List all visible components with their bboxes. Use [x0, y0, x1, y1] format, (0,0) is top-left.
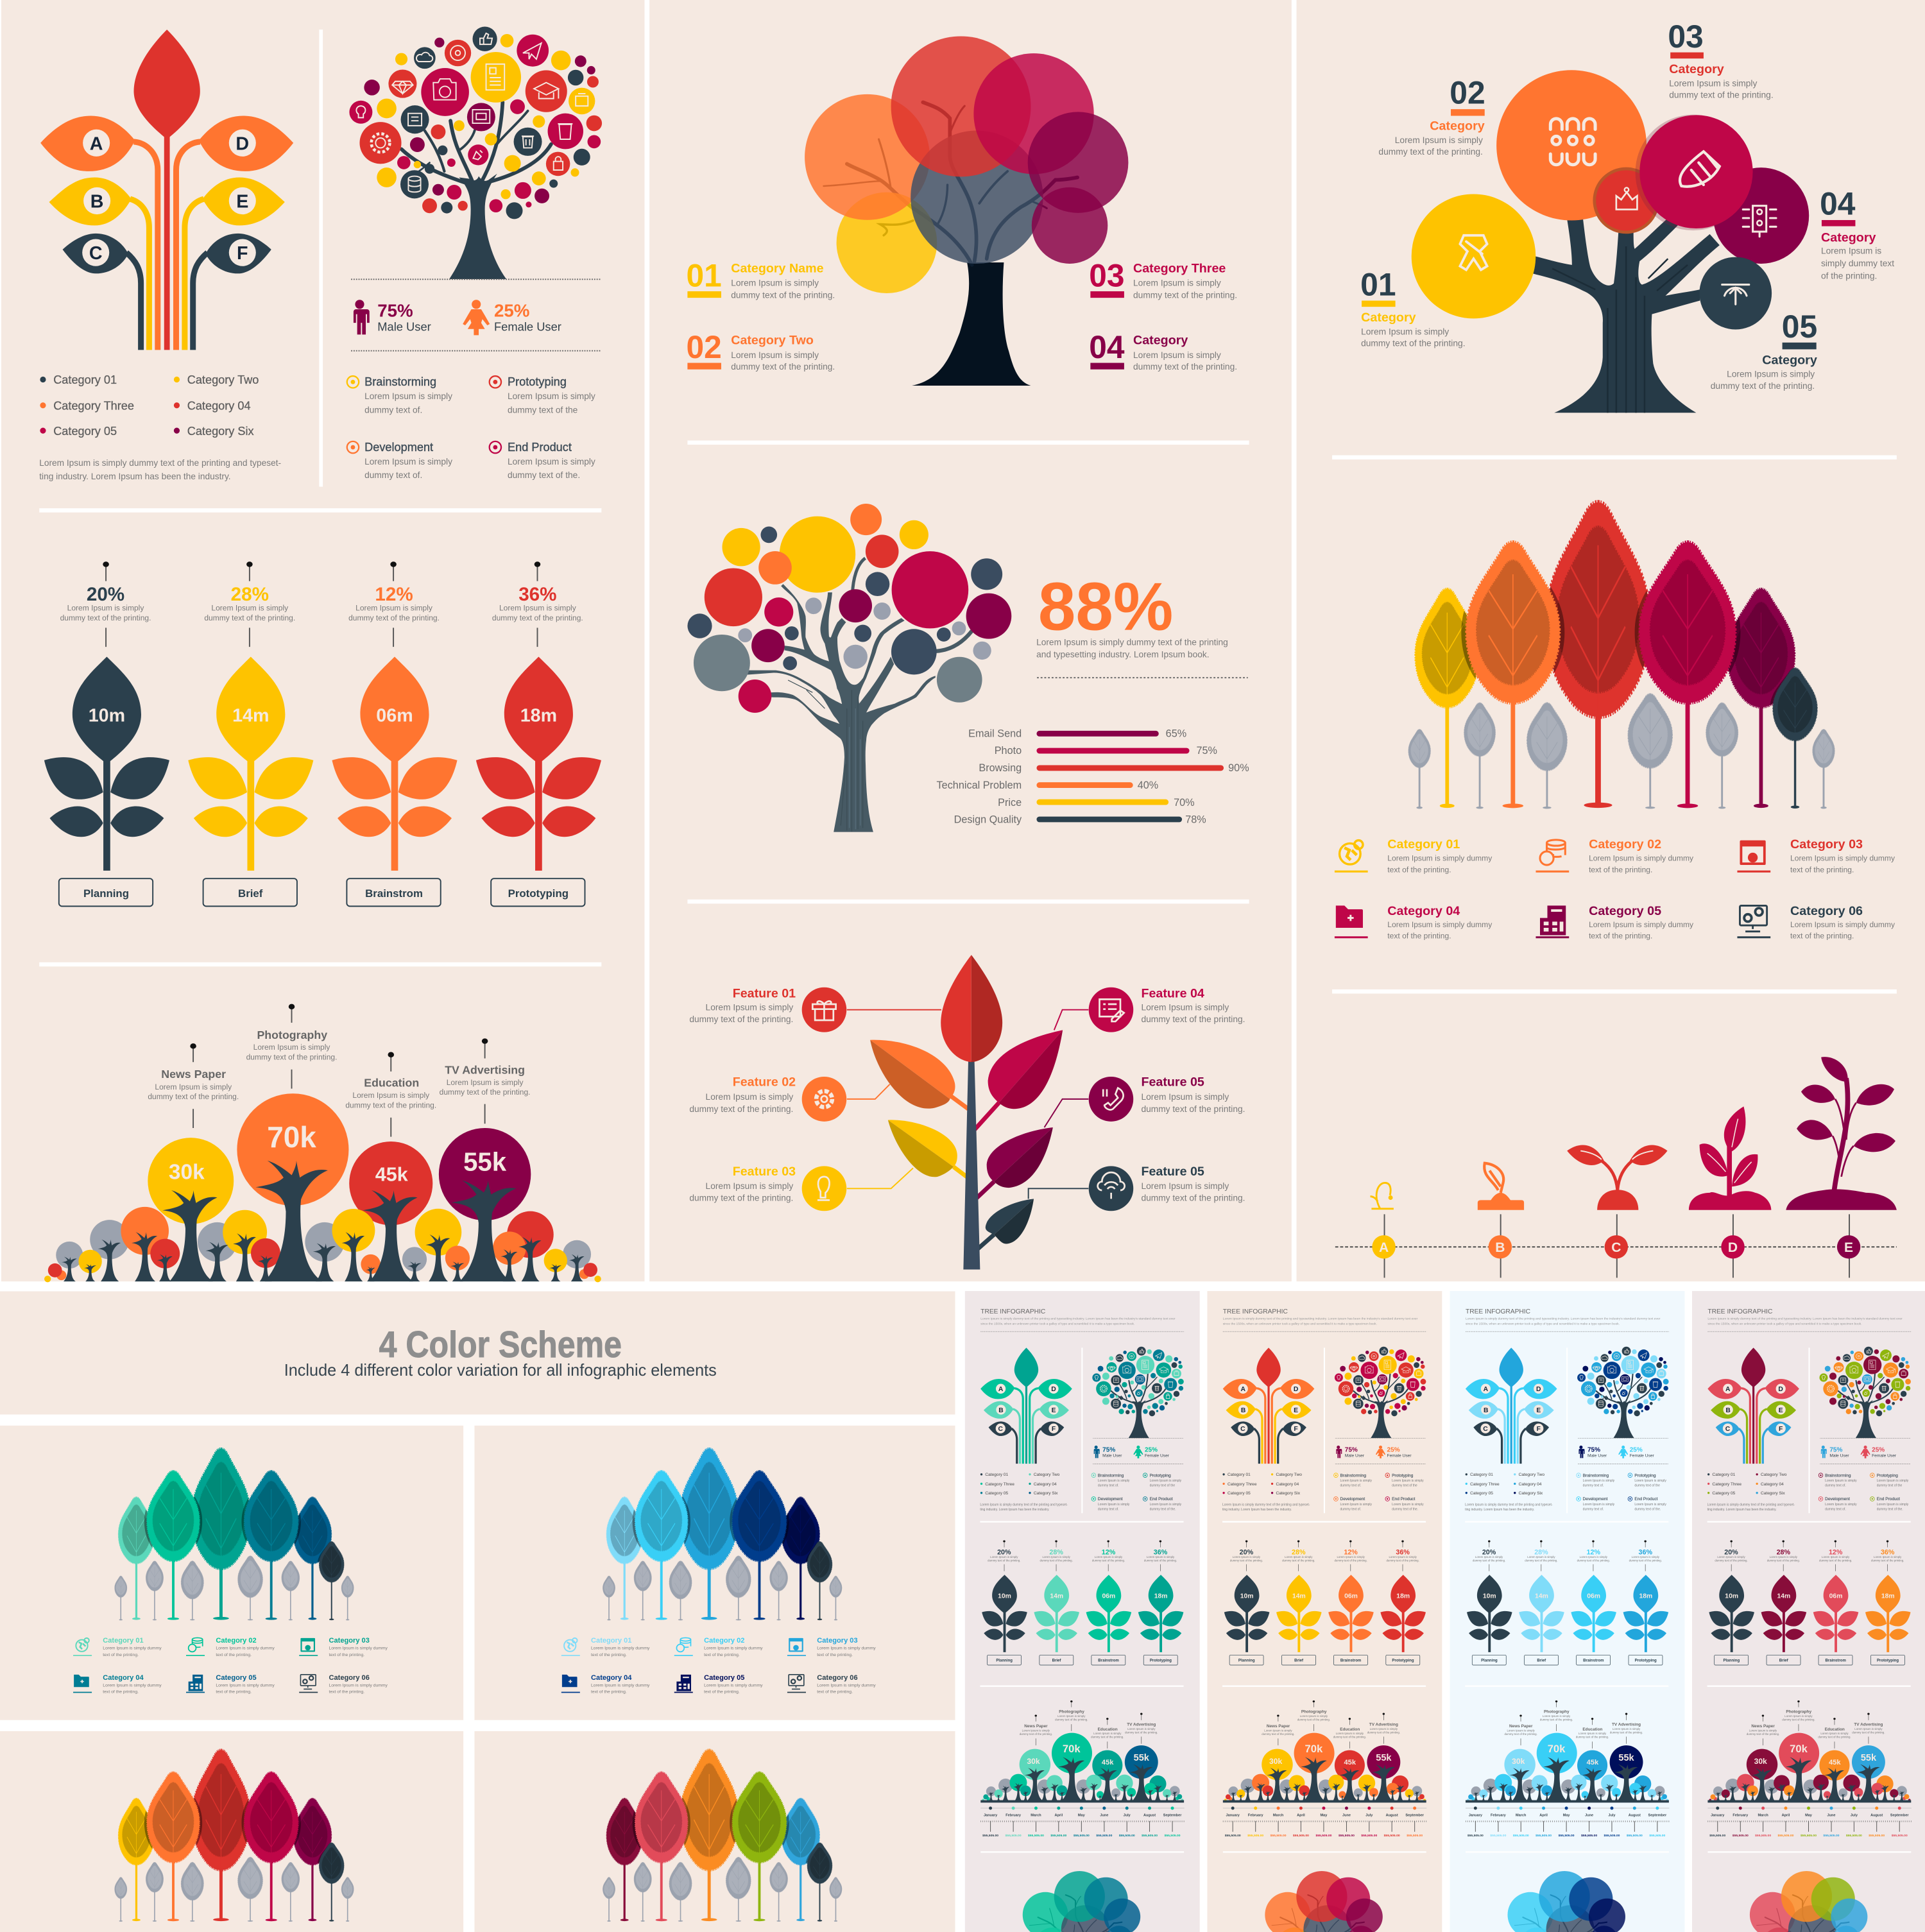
stage C seedling	[1567, 1145, 1668, 1210]
overlap shadows between leaves	[1461, 542, 1820, 740]
poster ground and month timeline: $55,505.00	[1247, 1834, 1263, 1838]
poster heading: Lorem Ipsum is simply dummy text of the printing and typesetting industry. Lorem Ipsum has been the industry's standard dummy text ever	[1223, 1317, 1418, 1321]
poster ground and month timeline: $55,505.00	[1315, 1834, 1332, 1838]
chart: forest bubbles: 30k	[169, 1161, 205, 1184]
chart: four sprig plants with percentages: 28%	[231, 584, 269, 605]
poster ground and month timeline: March	[1273, 1813, 1284, 1817]
category labels around tree: Category	[1669, 62, 1724, 76]
chart: forest bubbles: Lorem Ipsum is simply	[253, 1043, 330, 1052]
chart: four sprig plants with percentages: dummy text of the printing.	[60, 613, 151, 622]
chart: four sprig plants with percentages: Lorem Ipsum is simply	[211, 603, 288, 613]
category labels 01 to 04: Category Name	[731, 261, 824, 275]
category labels 01 to 04: Lorem Ipsum is simply	[731, 350, 819, 360]
bar chart: usage	[937, 728, 1249, 826]
chart: four sprig plants with percentages: 36%	[518, 584, 557, 605]
poster ground and month timeline: May	[1321, 1813, 1328, 1817]
category grid with icons: Category 04	[1387, 904, 1460, 918]
leaf branch with six features: Lorem Ipsum is simply	[1141, 1092, 1229, 1102]
category labels around tree	[1360, 19, 1894, 391]
four feature bullets: Brainstorming	[364, 375, 436, 388]
chart: four sprig plants with percentages: 14m	[232, 705, 270, 726]
category labels around tree: Category	[1430, 119, 1485, 133]
male and female user stats: 75%	[377, 300, 413, 321]
poster: warm	[1207, 1291, 1442, 1932]
chart: four sprig plants with percentages: Planning	[83, 887, 129, 900]
bar chart: usage: Email Send	[968, 728, 1022, 739]
four feature bullets: Lorem Ipsum is simply	[508, 391, 595, 401]
plant growth timeline A to E: C	[1611, 1240, 1621, 1255]
chart: forest bubbles: dummy text of the printing.	[440, 1088, 531, 1097]
stage D young plant	[1689, 1106, 1771, 1210]
category labels 01 to 04: Lorem Ipsum is simply	[1133, 278, 1221, 288]
category labels 01 to 04: 04	[1089, 329, 1125, 365]
icon: buildings	[1540, 905, 1566, 935]
category labels around tree: Lorem Ipsum is simply	[1727, 369, 1815, 379]
male and female user stats: Female User	[494, 320, 561, 334]
chart: forest bubbles: 70k	[267, 1120, 316, 1154]
panel backgrounds: three upper columns	[1, 0, 1925, 1281]
chart: four sprig plants with percentages: Lorem Ipsum is simply	[499, 603, 576, 613]
chart: four sprig plants with percentages	[44, 561, 601, 906]
chart: four sprig plants with percentages: 06m	[376, 705, 413, 726]
leaf tree with A-F categories: D	[235, 133, 249, 154]
plant growth timeline A to E: D	[1728, 1240, 1738, 1255]
four feature bullets: Lorem Ipsum is simply	[364, 457, 452, 466]
chart: forest bubbles: Education	[364, 1077, 419, 1090]
category labels 01 to 04: 01	[686, 257, 722, 293]
bubble tree with wood trunk	[687, 504, 1011, 832]
poster ground and month timeline: February	[1248, 1813, 1264, 1817]
chart: forest bubbles: Photography	[257, 1029, 327, 1041]
legend: six categories and paragraph	[39, 373, 281, 481]
category labels around tree: Lorem Ipsum is	[1821, 246, 1881, 256]
poster: scaled crown tree	[1265, 1871, 1383, 1932]
bar chart: usage: 75%	[1196, 745, 1217, 757]
bar chart: usage: 90%	[1228, 762, 1249, 774]
leaf tree with A-F categories: E	[236, 192, 248, 212]
panel: 4 color scheme title: 4 Color Scheme	[379, 1324, 622, 1365]
leaf branch with six features	[689, 955, 1245, 1269]
four feature bullets: dummy text of the	[508, 405, 578, 415]
stage E grown plant	[1786, 1057, 1897, 1210]
category labels around tree: Lorem Ipsum is simply	[1395, 135, 1483, 145]
panel: left column	[39, 26, 602, 1282]
category grid with icons: Lorem Ipsum is simply dummy	[1790, 853, 1895, 862]
bar chart: usage: 65%	[1166, 728, 1186, 739]
leaf branch with six features: Feature 04	[1141, 986, 1204, 1000]
category grid with icons: text of the printing.	[1387, 931, 1451, 940]
sprig: prototyping	[476, 657, 601, 871]
chart: forest bubbles: Lorem Ipsum is simply	[352, 1091, 429, 1100]
poster heading: TREE INFOGRAPHIC	[1223, 1308, 1288, 1315]
chart: forest bubbles: TV Advertising	[445, 1063, 525, 1077]
bar chart: usage: 40%	[1138, 780, 1158, 791]
leaf tree with A-F categories: C	[89, 243, 103, 264]
legend: six categories and paragraph: Category Six	[187, 425, 254, 438]
chart: four sprig plants with percentages: 10m	[89, 705, 125, 726]
chart: four sprig plants with percentages: Brainstrom	[365, 887, 423, 900]
male and female user stats: Male User	[377, 320, 431, 334]
leaf branch with six features: Lorem Ipsum is simply	[706, 1181, 793, 1191]
leaf branch with six features: Feature 01	[733, 986, 796, 1000]
category grid with icons: Lorem Ipsum is simply dummy	[1589, 853, 1694, 862]
chart: four sprig plants with percentages: 12%	[375, 584, 413, 605]
legend: six categories and paragraph: Lorem Ipsum is simply dummy text of the printing and typeset-	[39, 458, 281, 468]
leafy tree grove	[1408, 502, 1835, 808]
leaf branch with six features: Lorem Ipsum is simply	[1141, 1181, 1229, 1191]
category labels around tree: dummy text of the printing.	[1361, 338, 1466, 348]
four feature bullets: Prototyping	[508, 375, 567, 388]
stat: 88 percent: Lorem Ipsum is simply dummy text of the printing	[1036, 637, 1228, 647]
category grid with icons: Category 02	[1589, 837, 1661, 851]
stat: 88 percent: and typesetting industry. Lorem Ipsum book.	[1036, 649, 1210, 659]
poster ground and month timeline: June	[1342, 1813, 1351, 1817]
stat: 88 percent: 88%	[1038, 569, 1173, 644]
poster background	[1207, 1291, 1442, 1932]
category grid with icons: Category 05	[1589, 904, 1661, 918]
category labels 01 to 04: Lorem Ipsum is simply	[731, 278, 819, 288]
poster ground and month timeline: $55,505.00	[1270, 1834, 1287, 1838]
four feature bullets: dummy text of the.	[508, 470, 580, 480]
chart: forest bubbles: Lorem Ipsum is simply	[155, 1082, 232, 1091]
bar chart: usage: Browsing	[979, 762, 1022, 774]
leaf branch with six features: Feature 05	[1141, 1165, 1204, 1179]
category grid with icons: Lorem Ipsum is simply dummy	[1790, 920, 1895, 929]
icon: medical folder	[1336, 905, 1363, 928]
category labels around tree: 01	[1360, 266, 1396, 302]
category grid with icons: text of the printing.	[1790, 866, 1854, 875]
category labels around tree: Category	[1821, 230, 1876, 244]
leaf branch with six features: dummy text of the printing.	[689, 1104, 793, 1114]
legend: six categories and paragraph: Category 05	[53, 425, 117, 438]
panel: teal colour variation	[0, 1426, 463, 1720]
category labels 01 to 04: dummy text of the printing.	[1133, 291, 1237, 300]
chart: forest bubbles: dummy text of the printing.	[148, 1092, 239, 1101]
chart: four sprig plants with percentages: dummy text of the printing.	[492, 613, 583, 622]
category labels 01 to 04: Lorem Ipsum is simply	[1133, 350, 1221, 360]
panel: blue colour variation	[474, 1426, 955, 1720]
leaf branch with six features: Feature 05	[1141, 1075, 1204, 1090]
category labels around tree: 04	[1820, 186, 1856, 222]
panel: middle column	[686, 36, 1249, 1269]
poster ground and month timeline: $55,505.00	[1384, 1834, 1400, 1838]
chart: forest bubbles: Lorem Ipsum is simply	[447, 1078, 523, 1087]
chart: forest bubbles: News Paper	[161, 1068, 226, 1081]
category labels around tree: Lorem Ipsum is simply	[1361, 326, 1449, 336]
category labels around tree: 05	[1782, 309, 1817, 345]
chart: four sprig plants with percentages: dummy text of the printing.	[348, 613, 440, 622]
chart: forest bubbles: dummy text of the printing.	[345, 1100, 436, 1109]
poster: mixed	[1692, 1291, 1925, 1932]
plant growth timeline A to E: A	[1379, 1240, 1389, 1255]
leaf branch with six features: dummy text of the printing.	[1141, 1014, 1245, 1024]
poster ground and month timeline: $55,505.00	[1361, 1834, 1378, 1838]
leaf branch with six features: Feature 03	[733, 1165, 796, 1179]
four feature bullets	[347, 375, 595, 480]
feature icons	[812, 999, 1125, 1200]
plant growth timeline A to E	[1335, 1057, 1897, 1278]
panel: 4 color scheme title	[0, 1291, 955, 1414]
category grid with icons: Category 03	[1790, 837, 1863, 851]
category grid with icons: text of the printing.	[1589, 866, 1652, 875]
category grid with icons: Lorem Ipsum is simply dummy	[1387, 853, 1493, 862]
poster ground and month timeline: September	[1405, 1813, 1425, 1817]
male and female user stats: 25%	[494, 300, 529, 321]
category labels around tree: Lorem Ipsum is simply	[1669, 78, 1757, 88]
chart: forest bubbles	[44, 1004, 601, 1282]
icon: male user	[352, 300, 370, 334]
poster heading: since the 1500s, when an unknown printer took a galley of type and scrambled it to make a type specimen book.	[1223, 1322, 1377, 1325]
plant growth timeline A to E: E	[1844, 1240, 1853, 1255]
category labels 01 to 04: Category Two	[731, 334, 814, 348]
category labels around tree: dummy text of the printing.	[1669, 90, 1774, 100]
leaf branch with six features: Lorem Ipsum is simply	[706, 1092, 793, 1102]
leaf tree with A-F categories: F	[237, 243, 248, 264]
poster ground and month timeline: $55,505.00	[1293, 1834, 1309, 1838]
chart: four sprig plants with percentages: dummy text of the printing.	[204, 613, 295, 622]
four feature bullets: Lorem Ipsum is simply	[508, 457, 595, 466]
icon: monitor gears	[1740, 905, 1767, 932]
icon: coins	[1540, 840, 1565, 865]
category grid with icons	[1335, 837, 1895, 940]
chart: forest bubbles: 55k	[463, 1147, 507, 1176]
poster ground and month timeline: $55,505.00	[1225, 1834, 1241, 1838]
panel: warm colour variation	[0, 1731, 463, 1932]
category labels 01 to 04: dummy text of the printing.	[731, 291, 835, 300]
chart: forest bubbles: dummy text of the printing.	[246, 1052, 337, 1061]
bar chart: usage: Technical Problem	[937, 780, 1022, 791]
leaf tree with A-F categories: A	[90, 133, 103, 154]
bar chart: usage: Price	[998, 797, 1022, 808]
poster: blue	[1450, 1291, 1684, 1932]
poster ground and month timeline: $55,505.00	[1339, 1834, 1355, 1838]
legend: six categories and paragraph: Category 01	[53, 373, 117, 386]
category labels around tree: of the printing.	[1821, 271, 1877, 281]
category grid with icons: Lorem Ipsum is simply dummy	[1589, 920, 1694, 929]
category labels around tree: 03	[1668, 19, 1704, 55]
chart: forest bubbles: 45k	[375, 1164, 409, 1186]
category labels 01 to 04: Category Three	[1133, 261, 1226, 275]
four feature bullets: Lorem Ipsum is simply	[364, 391, 452, 401]
leaf branch with six features: Feature 02	[733, 1075, 796, 1090]
poster ground and month timeline: August	[1386, 1813, 1398, 1817]
chart: four sprig plants with percentages: Prototyping	[508, 887, 569, 900]
chart: four sprig plants with percentages: Brief	[238, 887, 263, 900]
leaf tree with A-F categories	[40, 30, 293, 350]
category labels around tree: dummy text of the printing.	[1378, 146, 1483, 157]
icons inside tree circles	[356, 33, 588, 192]
poster ground and month timeline: July	[1365, 1813, 1373, 1817]
leaf branch with six features: Lorem Ipsum is simply	[706, 1003, 793, 1013]
circle tree with icons	[349, 26, 602, 279]
sprig: brief	[188, 657, 313, 871]
icon: globe pin	[1340, 841, 1363, 864]
chart: four sprig plants with percentages: 20%	[87, 584, 124, 605]
category grid with icons: text of the printing.	[1790, 931, 1854, 940]
panel: right column	[1332, 19, 1897, 1278]
dotted divider lines	[351, 279, 601, 351]
leaf tree with A-F categories: B	[90, 192, 103, 212]
category labels 01 to 04: 02	[686, 329, 722, 365]
leaf branch with six features: Lorem Ipsum is simply	[1141, 1003, 1229, 1013]
plant growth timeline A to E: B	[1495, 1240, 1505, 1255]
panel: 4 color scheme title: Include 4 different color variation for all infographic elements	[284, 1362, 717, 1380]
category labels around tree: dummy text of the printing.	[1711, 380, 1815, 391]
poster: scaled first column	[1222, 1347, 1426, 1801]
category grid with icons: Lorem Ipsum is simply dummy	[1387, 920, 1493, 929]
bar chart: usage: Photo	[995, 745, 1022, 757]
poster heading	[1223, 1308, 1418, 1325]
legend: six categories and paragraph: ting industry. Lorem Ipsum has been the industry.	[39, 472, 231, 481]
leaf branch with six features: dummy text of the printing.	[1141, 1193, 1245, 1202]
category labels 01 to 04: Category	[1133, 334, 1188, 348]
poster ground and month timeline: $55,505.00	[1407, 1834, 1423, 1838]
bar chart: usage: 78%	[1185, 814, 1206, 826]
legend: six categories and paragraph: Category Three	[53, 399, 134, 413]
four feature bullets: dummy text of.	[364, 405, 422, 415]
four feature bullets: dummy text of.	[364, 470, 422, 480]
category labels around tree: 02	[1450, 74, 1485, 110]
category grid with icons: Category 06	[1790, 904, 1863, 918]
category labels around tree: Category	[1361, 311, 1416, 325]
sprig: planning	[44, 657, 169, 871]
sprig: brainstorm	[332, 657, 458, 871]
category labels 01 to 04	[686, 257, 1237, 372]
poster ground and month timeline	[1223, 1800, 1426, 1838]
panel: mixed colour variation	[474, 1731, 955, 1932]
legend: six categories and paragraph: Category 04	[187, 399, 251, 413]
chart: four sprig plants with percentages: 18m	[520, 705, 557, 726]
male and female user stats	[352, 300, 561, 335]
category grid with icons: Category 01	[1387, 837, 1460, 851]
poster ground and month timeline: January	[1226, 1813, 1240, 1817]
circle icons	[1460, 119, 1776, 304]
four feature bullets: End Product	[508, 441, 572, 454]
category labels around tree: simply dummy text	[1821, 258, 1894, 268]
leaf branch with six features: dummy text of the printing.	[689, 1193, 793, 1202]
icon: browser gear	[1740, 841, 1766, 865]
category grid with icons: text of the printing.	[1387, 866, 1451, 875]
leaf branch with six features: dummy text of the printing.	[689, 1014, 793, 1024]
legend: six categories and paragraph: Category Two	[187, 373, 259, 386]
four feature bullets: Development	[364, 441, 433, 454]
poster ground and month timeline: April	[1297, 1813, 1305, 1817]
icon: female user	[463, 300, 490, 335]
stage A seed	[1370, 1183, 1394, 1209]
overlapping crown tree	[805, 36, 1128, 386]
category labels 01 to 04: 03	[1089, 257, 1125, 293]
leaf branch with six features: dummy text of the printing.	[1141, 1104, 1245, 1114]
bar chart: usage: 70%	[1174, 797, 1195, 808]
chart: four sprig plants with percentages: Lorem Ipsum is simply	[355, 603, 432, 613]
stat: 88 percent	[1036, 569, 1228, 659]
poster: teal	[965, 1291, 1200, 1932]
bar chart: usage: Design Quality	[954, 814, 1022, 826]
category labels around tree: Category	[1762, 353, 1817, 367]
chart: four sprig plants with percentages: Lorem Ipsum is simply	[67, 603, 144, 613]
leafy trees and six categories	[1335, 502, 1895, 940]
category labels 01 to 04: dummy text of the printing.	[1133, 362, 1237, 372]
category grid with icons: text of the printing.	[1589, 931, 1652, 940]
category labels 01 to 04: dummy text of the printing.	[731, 362, 835, 372]
big tree with five icon circles	[1412, 70, 1809, 413]
stage B sprout	[1478, 1163, 1524, 1210]
